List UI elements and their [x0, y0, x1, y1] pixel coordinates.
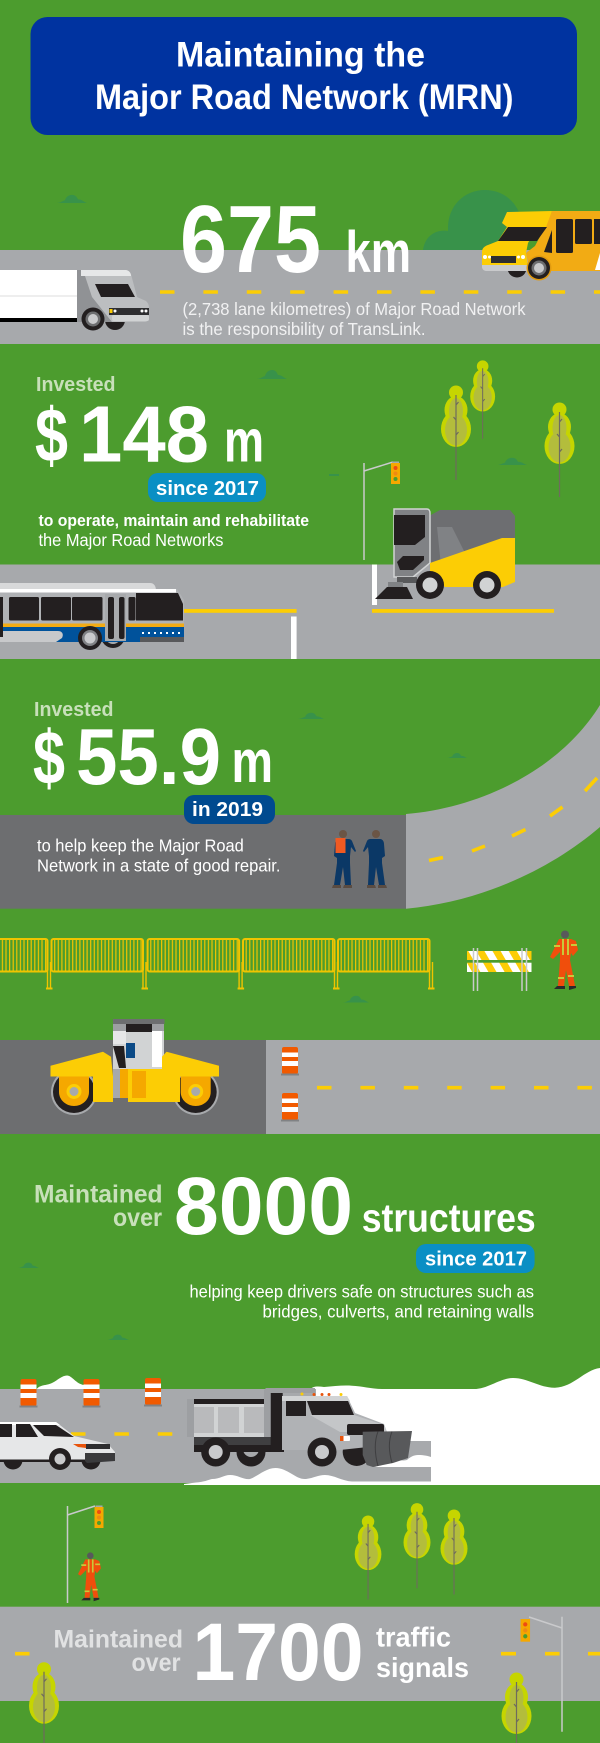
stat: 675 km: 675: [180, 186, 321, 293]
description: Network in a state of good repair.: [37, 856, 280, 876]
unit: traffic signals: [376, 1622, 469, 1683]
panel: 675 km road: [0, 186, 600, 344]
road: [0, 1607, 600, 1701]
bushes: [298, 713, 467, 758]
icon: street sweeper: [375, 509, 515, 599]
icon: city bus: [0, 583, 184, 650]
label: maintained over: Maintained: [54, 1626, 183, 1654]
icon: white truck: [0, 270, 149, 330]
stat: 55.9 m: [33, 712, 273, 801]
pill: since 2017: since 2017: [425, 1248, 527, 1271]
pill: since 2017: since 2017: [156, 477, 259, 500]
description: to operate, maintain and rehabilitate: [38, 511, 309, 530]
stat: 148 m: [35, 390, 264, 478]
road: [0, 564, 600, 659]
stat: 55.9 m: $: [33, 716, 65, 801]
icon: snow plow truck: [187, 1388, 412, 1467]
cones: [20, 1378, 162, 1408]
stat: 8000: 8000: [174, 1161, 353, 1252]
stat: 675 km: km: [346, 220, 411, 285]
trees: [29, 1662, 532, 1743]
icon: road worker: [550, 930, 578, 990]
stat: 55.9 m: 55.9: [76, 712, 221, 801]
panel: 8000 structures: [0, 1161, 600, 1485]
panel: 1700 traffic signals: [0, 1503, 600, 1743]
large bush: [423, 190, 522, 250]
description: is the responsibility of TransLink.: [182, 319, 426, 339]
bush: [57, 195, 87, 203]
title banner: [30, 17, 577, 135]
road dashes: [160, 290, 600, 294]
description: the Major Road Networks: [38, 530, 224, 550]
title banner: Major Road Network (MRN): [95, 78, 514, 117]
description: [37, 836, 280, 876]
label: invested: Invested: [34, 699, 114, 721]
description: (2,738 lane kilometres) of Major Road Network: [182, 299, 526, 319]
icon: traffic signal: [364, 462, 400, 560]
description: to help keep the Major Road: [37, 836, 244, 856]
trees: [355, 1503, 468, 1600]
pill: in 2019: [184, 795, 275, 824]
icon: white SUV: [0, 1422, 115, 1470]
icon: traffic signal: [68, 1506, 104, 1603]
road dashes: [71, 1432, 175, 1436]
road: [0, 1389, 316, 1483]
description: [38, 511, 309, 550]
bushes: [18, 1263, 129, 1340]
icon: barricade: [467, 948, 532, 991]
stat: 148 m: $: [35, 394, 68, 478]
title banner: Maintaining the: [176, 36, 425, 74]
label: maintained over: over: [113, 1204, 162, 1232]
curved road dashes: [429, 778, 597, 860]
trees: [441, 360, 574, 497]
road markings: [184, 564, 554, 659]
description: [182, 299, 526, 339]
stat: 1700: 1700: [192, 1607, 364, 1698]
description: [190, 1282, 534, 1322]
pill: in 2019: in 2019: [192, 798, 263, 821]
pill: since 2017: [416, 1244, 535, 1273]
snow banks top: [36, 1368, 600, 1390]
cones: [281, 1047, 299, 1122]
icon: two workers talking: [332, 830, 387, 888]
bush: [343, 996, 369, 1002]
unit: traffic signals: signals: [376, 1652, 469, 1683]
stat: 148 m: m: [224, 408, 264, 474]
curved road: [406, 705, 600, 909]
road with roller: [0, 1040, 600, 1134]
label: maintained over: over: [132, 1649, 181, 1677]
label: invested: Invested: [36, 374, 116, 396]
icon: road roller: [50, 1019, 219, 1115]
description: helping keep drivers safe on structures such as: [190, 1282, 534, 1302]
stat: 55.9 m: m: [232, 728, 273, 795]
stat: 148 m: 148: [79, 390, 209, 478]
unit: structures: structures: [362, 1196, 536, 1240]
icon: yellow shuttle bus: [482, 211, 600, 280]
icon: road worker: [78, 1552, 101, 1601]
panel: 55.9 million invested: [0, 699, 600, 1134]
snow field: [184, 1389, 600, 1485]
road: [0, 250, 600, 344]
stat: 675 km: [180, 186, 411, 293]
description: bridges, culverts, and retaining walls: [262, 1302, 534, 1322]
unit: traffic signals: traffic: [376, 1622, 451, 1653]
label: maintained over: Maintained: [34, 1180, 163, 1208]
label: maintained over: [54, 1626, 183, 1677]
icon: traffic signal right: [520, 1617, 562, 1732]
label: maintained over: [34, 1180, 163, 1232]
dark road: [0, 815, 406, 909]
pill: since 2017: [148, 473, 266, 502]
road dashes: [15, 1652, 600, 1655]
bushes: [257, 370, 527, 476]
panel: 148 million invested: [0, 360, 600, 659]
fence: [0, 939, 434, 990]
